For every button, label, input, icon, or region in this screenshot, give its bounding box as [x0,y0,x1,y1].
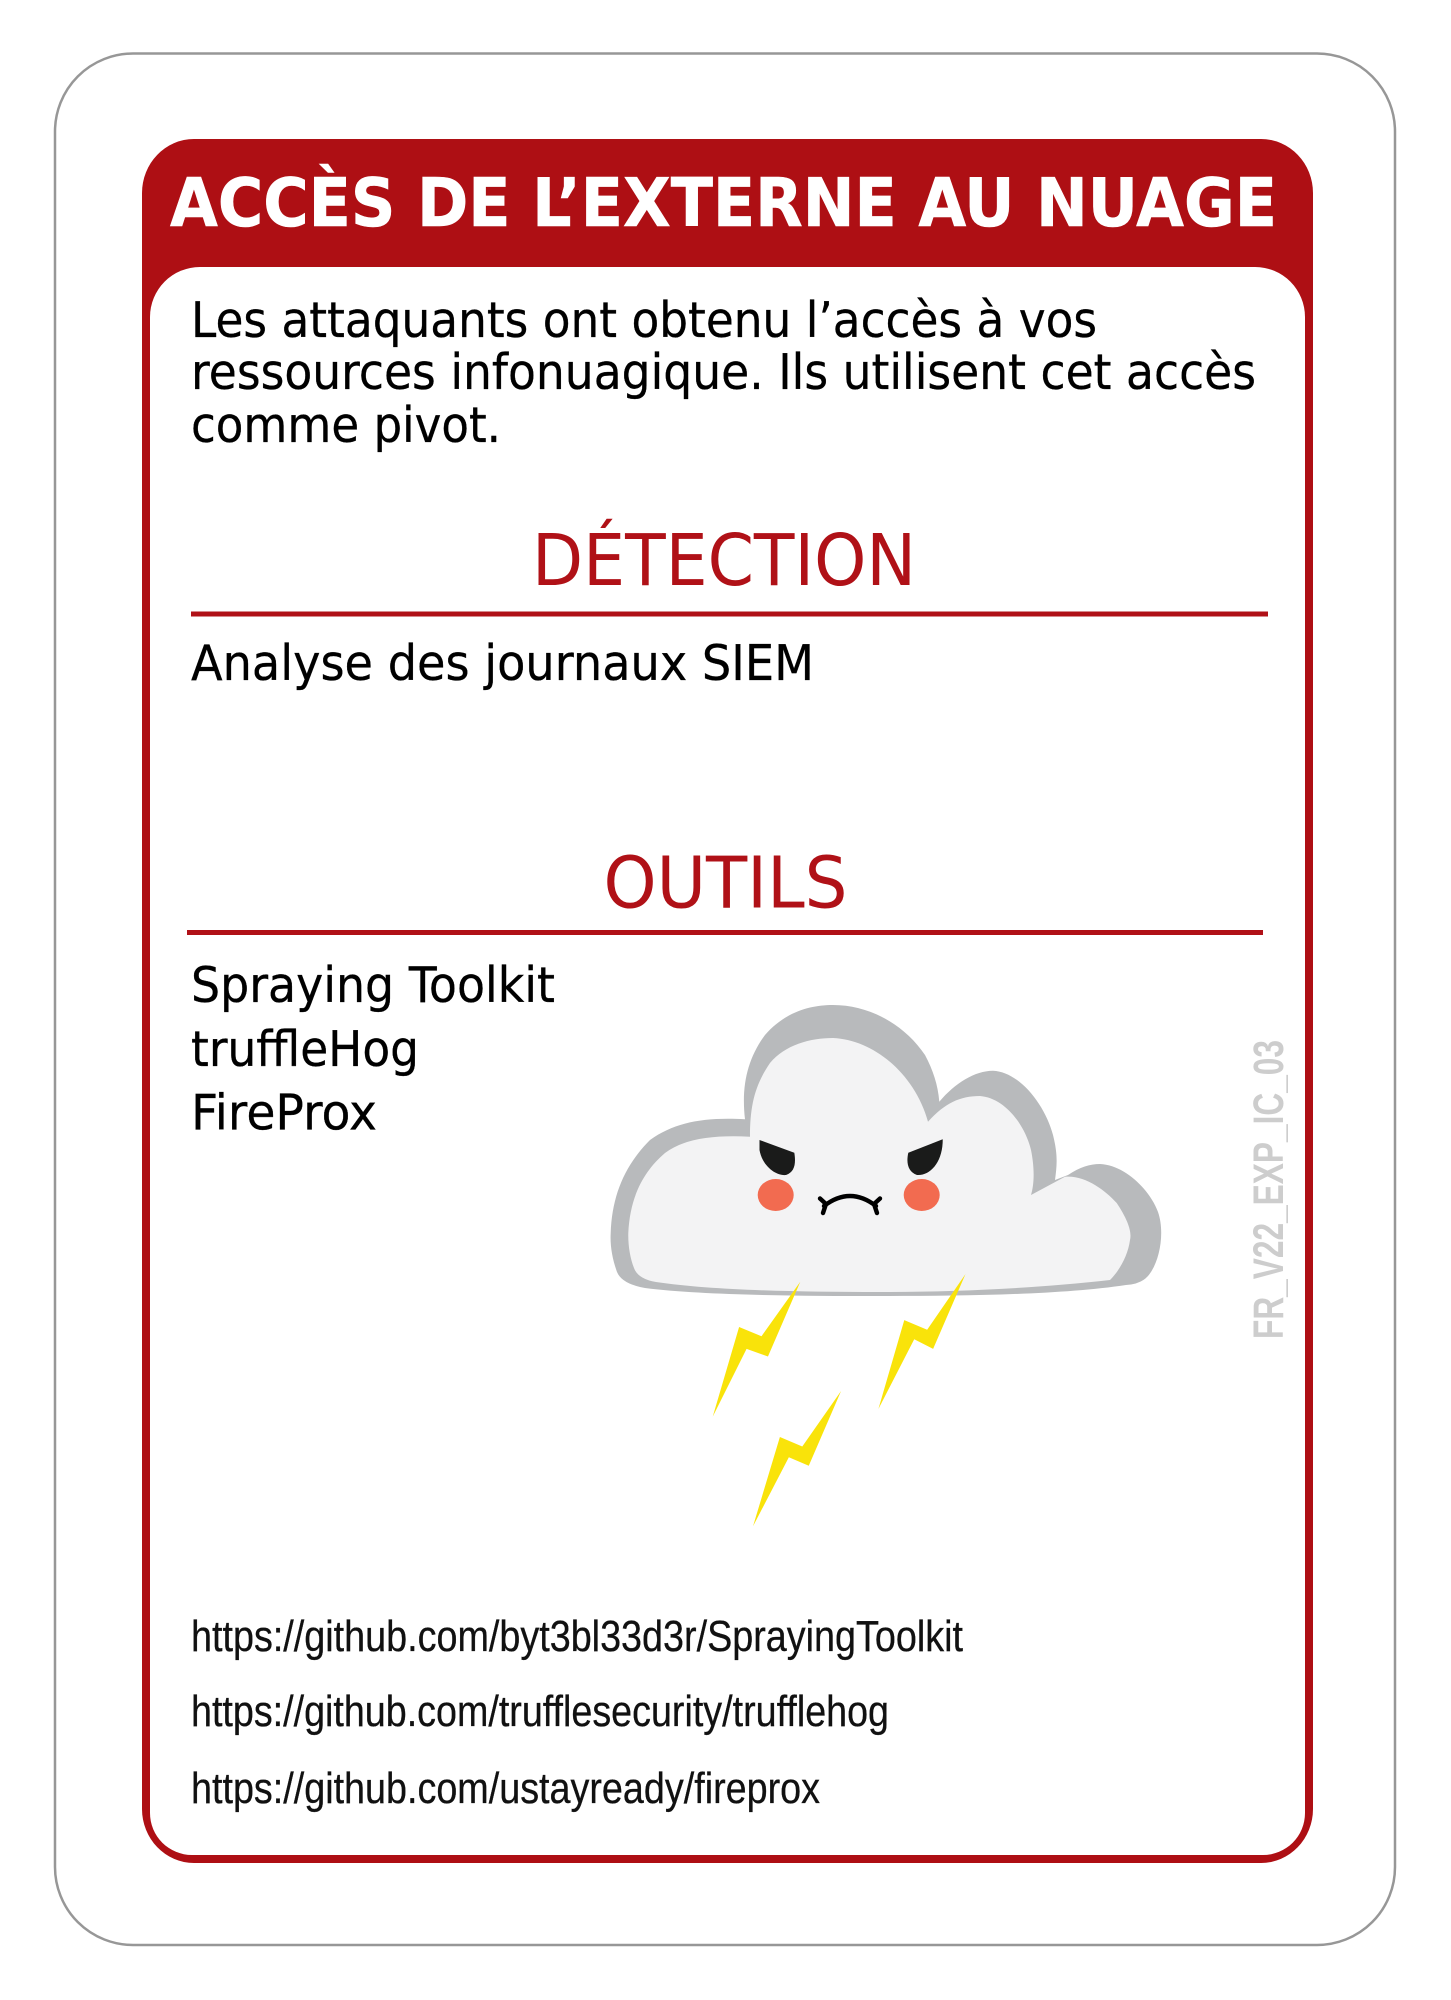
mouth [820,1196,880,1213]
white content panel [150,267,1305,1855]
title: ACCÈS DE L’EXTERNE AU NUAGE [170,163,1277,242]
left eye [760,1140,795,1175]
cheeks [758,1179,794,1211]
heading: détection: DÉTECTION [532,519,916,602]
detection text: Analyse des journaux SIEM [191,635,814,692]
description text: Les attaquants ont obtenu l’accès à vos [191,292,1097,349]
description text: comme pivot. [191,397,501,454]
description text [191,292,1256,454]
tools list: truffleHog [191,1021,419,1078]
reference URLs: https://github.com/ustayready/fireprox [191,1764,820,1813]
version code (vertical): FR_V22_EXP_IC_03 [1245,1040,1293,1339]
tools list: FireProx [191,1084,377,1142]
heading: outils: OUTILS [604,842,848,924]
icon: angry storm cloud [611,1005,1161,1526]
tools list: Spraying Toolkit [191,957,555,1014]
reference URLs: https://github.com/byt3bl33d3r/SprayingToolkit [191,1612,963,1661]
reference URLs: https://github.com/trufflesecurity/trufflehog [191,1687,889,1736]
reference URLs [191,1612,963,1813]
tools list [191,957,555,1142]
red card frame [142,139,1313,1863]
lightning bolts [713,1274,965,1526]
right eye [907,1139,943,1175]
description text: ressources infonuagique. Ils utilisent cet accès [191,344,1256,401]
